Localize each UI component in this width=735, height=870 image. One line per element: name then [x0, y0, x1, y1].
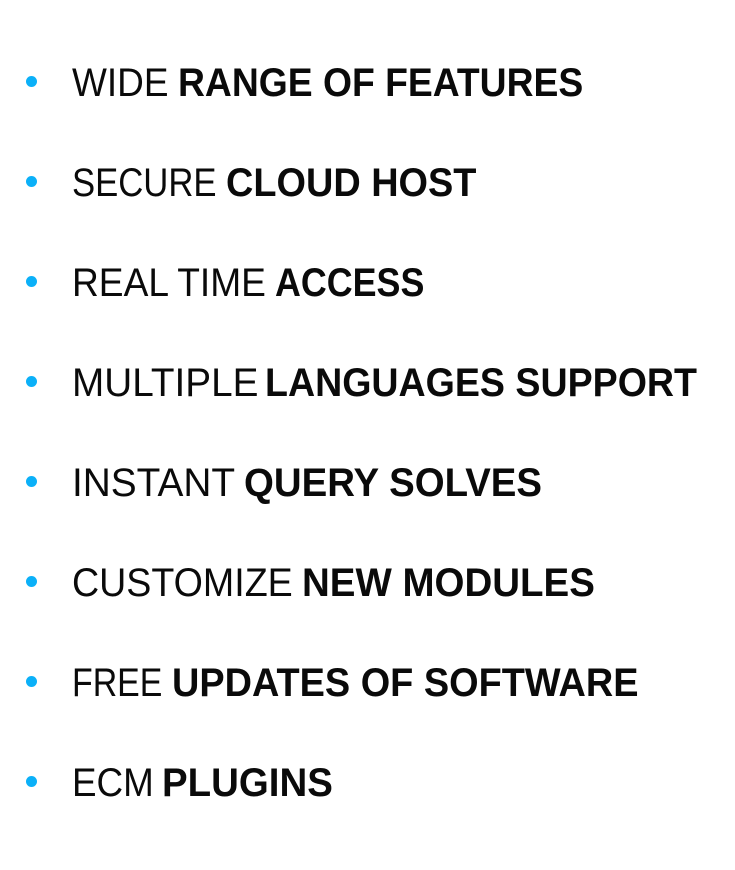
- list item: secure cloud host: [26, 161, 476, 205]
- list item: instant query solves: QUERY SOLVES: [244, 461, 542, 505]
- list item: multiple languages support: MULTIPLE: [72, 361, 258, 405]
- list item: ecm plugins: [26, 761, 333, 805]
- list item: customize new modules: [26, 561, 595, 605]
- list item: multiple languages support: LANGUAGES SUPPORT: [265, 361, 697, 405]
- list item: customize new modules: NEW MODULES: [302, 561, 595, 605]
- list item: real time access: REAL TIME: [72, 261, 266, 305]
- list item: free updates of software: UPDATES OF SOFTWARE: [172, 661, 639, 705]
- list item: wide range of features: RANGE OF FEATURES: [178, 61, 583, 105]
- list item: ecm plugins: PLUGINS: [162, 761, 333, 805]
- list item: instant query solves: INSTANT: [72, 461, 235, 505]
- list item: instant query solves: [26, 461, 542, 505]
- list item: ecm plugins: ECM: [72, 761, 154, 805]
- list item: wide range of features: WIDE: [72, 61, 169, 105]
- list item: free updates of software: FREE: [72, 661, 162, 705]
- list item: secure cloud host: SECURE: [72, 161, 217, 205]
- list item: real time access: [26, 261, 424, 305]
- list item: real time access: ACCESS: [275, 261, 424, 305]
- list item: multiple languages support: [26, 361, 697, 405]
- list item: secure cloud host: CLOUD HOST: [226, 161, 476, 205]
- list item: customize new modules: CUSTOMIZE: [72, 561, 293, 605]
